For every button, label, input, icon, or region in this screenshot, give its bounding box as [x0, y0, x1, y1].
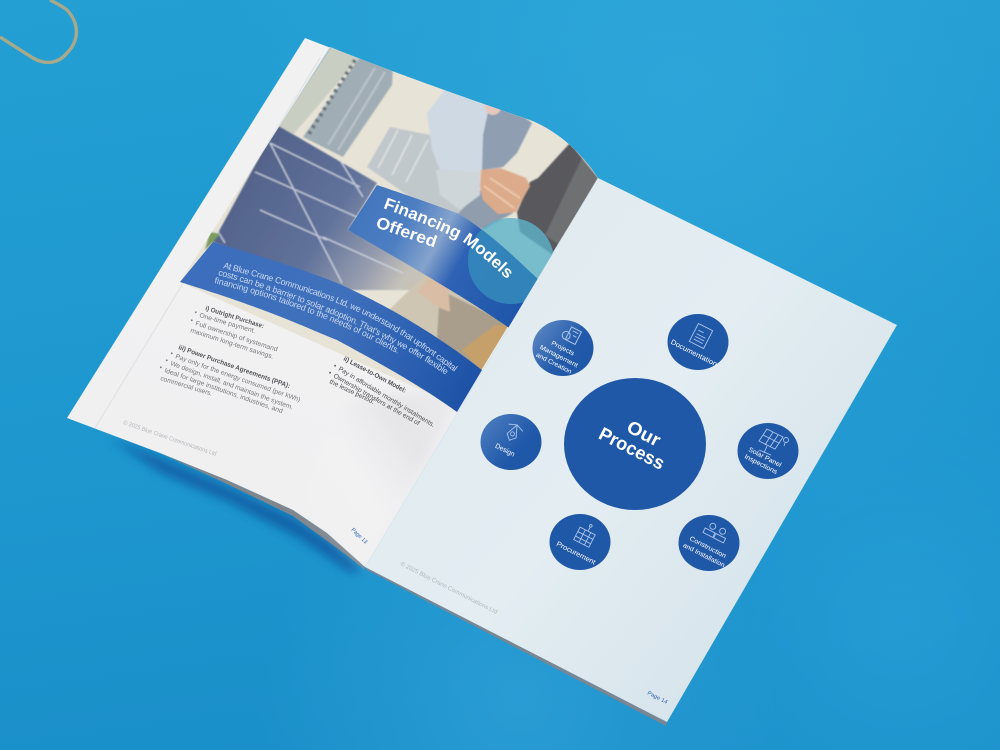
icon: document: [689, 323, 713, 349]
financing options column 2: the lease period.: [328, 378, 376, 406]
financing options column 1: •: [189, 317, 194, 325]
handshake: [480, 168, 530, 214]
title ribbon: [348, 185, 541, 330]
centre circle: Process: [596, 423, 668, 474]
financing options column 2: ii) Lease-to-Own Model:: [342, 356, 407, 395]
tower: [280, 48, 359, 134]
financing options column 1: commercial users.: [159, 375, 213, 398]
dark suit: [516, 144, 583, 254]
financing options column 1: maximum long-term savings.: [189, 327, 274, 361]
financing options column 1: •: [158, 364, 163, 372]
left page number: Page 13: [350, 527, 368, 545]
financing options column 1: iii) Power Purchase Agreements (PPA):: [177, 344, 291, 390]
centre circle: [564, 378, 706, 510]
brochure shadow: [110, 438, 362, 572]
icon: solar panel with magnifier: [759, 429, 788, 455]
financing options column 1: Ideal for large institutions, industries, and: [163, 367, 284, 415]
page edge thickness: [160, 453, 365, 570]
step: projects management and creation: [532, 320, 594, 376]
step: solar panel inspections: Solar Panel: [747, 446, 783, 469]
financing options column 1: •: [193, 309, 198, 317]
shirt: [427, 90, 488, 172]
financing options column 2: •: [327, 370, 333, 377]
financing options column 1: Pay only for the energy consumed (per kWh): [174, 353, 301, 404]
left page sheet: [67, 38, 598, 567]
right page bottom edge: [365, 567, 667, 726]
intro band: [180, 242, 482, 412]
financing options column 1: One-time payment.: [198, 312, 256, 335]
step: construction and installation: and Installation: [682, 542, 726, 569]
icon: blueprint and gear: [561, 325, 581, 344]
financing options column 1: Full ownership of systemand: [194, 320, 279, 354]
intro text: costs can be a barrier to solar adoption. That's why we offer flexible: [218, 271, 448, 374]
left page footer: © 2025 Blue Crane Communications Ltd: [122, 419, 217, 458]
financing options column 1: •: [169, 350, 174, 358]
financing options column 2: Ownership transfers at the end of: [332, 373, 421, 427]
right page footer: © 2025 Blue Crane Communications Ltd: [399, 561, 498, 616]
right page sheet: [365, 178, 897, 722]
right page: our process: [365, 178, 897, 726]
teal circle accent: [468, 218, 554, 304]
step: projects management and creation: Management: [538, 344, 579, 369]
step: documentation: [668, 314, 728, 370]
intro text: financing options tailored to the needs of our clients.: [214, 277, 398, 354]
step: design: [480, 414, 542, 470]
step: projects management and creation: Projects: [550, 340, 575, 357]
financing options column 1: We design, install, and maintain the system.: [169, 360, 294, 411]
step: solar panel inspections: [738, 423, 798, 479]
financing options column 1: i) Outright Purchase:: [204, 305, 265, 330]
paper clip curve: [0, 0, 76, 62]
left page: financing models: [67, 38, 598, 570]
solar panels: [213, 125, 440, 290]
right page number: Page 14: [646, 690, 668, 706]
financing options column 2: Pay in affordable monthly instalments.: [337, 366, 436, 429]
step: projects management and creation: and Creation: [535, 352, 573, 376]
title: Offered: [374, 214, 439, 251]
intro text: At Blue Crane Communications Ltd, we understand that upfront capital: [223, 262, 458, 372]
step: solar panel inspections: Inspections: [743, 453, 779, 476]
step: procurement: [550, 514, 610, 570]
step: procurement: Procurement: [555, 541, 596, 567]
financing options column 1: •: [164, 357, 169, 365]
translucent buildings: [367, 126, 464, 214]
financing options column 2: •: [332, 363, 338, 370]
financing options column 1: [158, 305, 301, 415]
hero photo: handshake and solar panels: [180, 47, 598, 394]
step: design: Design: [494, 443, 516, 459]
icon: drawing tool: [502, 421, 524, 444]
icon: workers: [703, 521, 729, 543]
title: Financing Models: [384, 198, 512, 278]
step: construction and installation: Construction: [688, 535, 727, 560]
step: construction and installation: [678, 515, 740, 571]
centre circle: Our: [624, 416, 664, 451]
icon: procurement boxes: [574, 521, 599, 547]
step: documentation: Documentation: [669, 339, 718, 368]
beige ground: [390, 276, 487, 338]
